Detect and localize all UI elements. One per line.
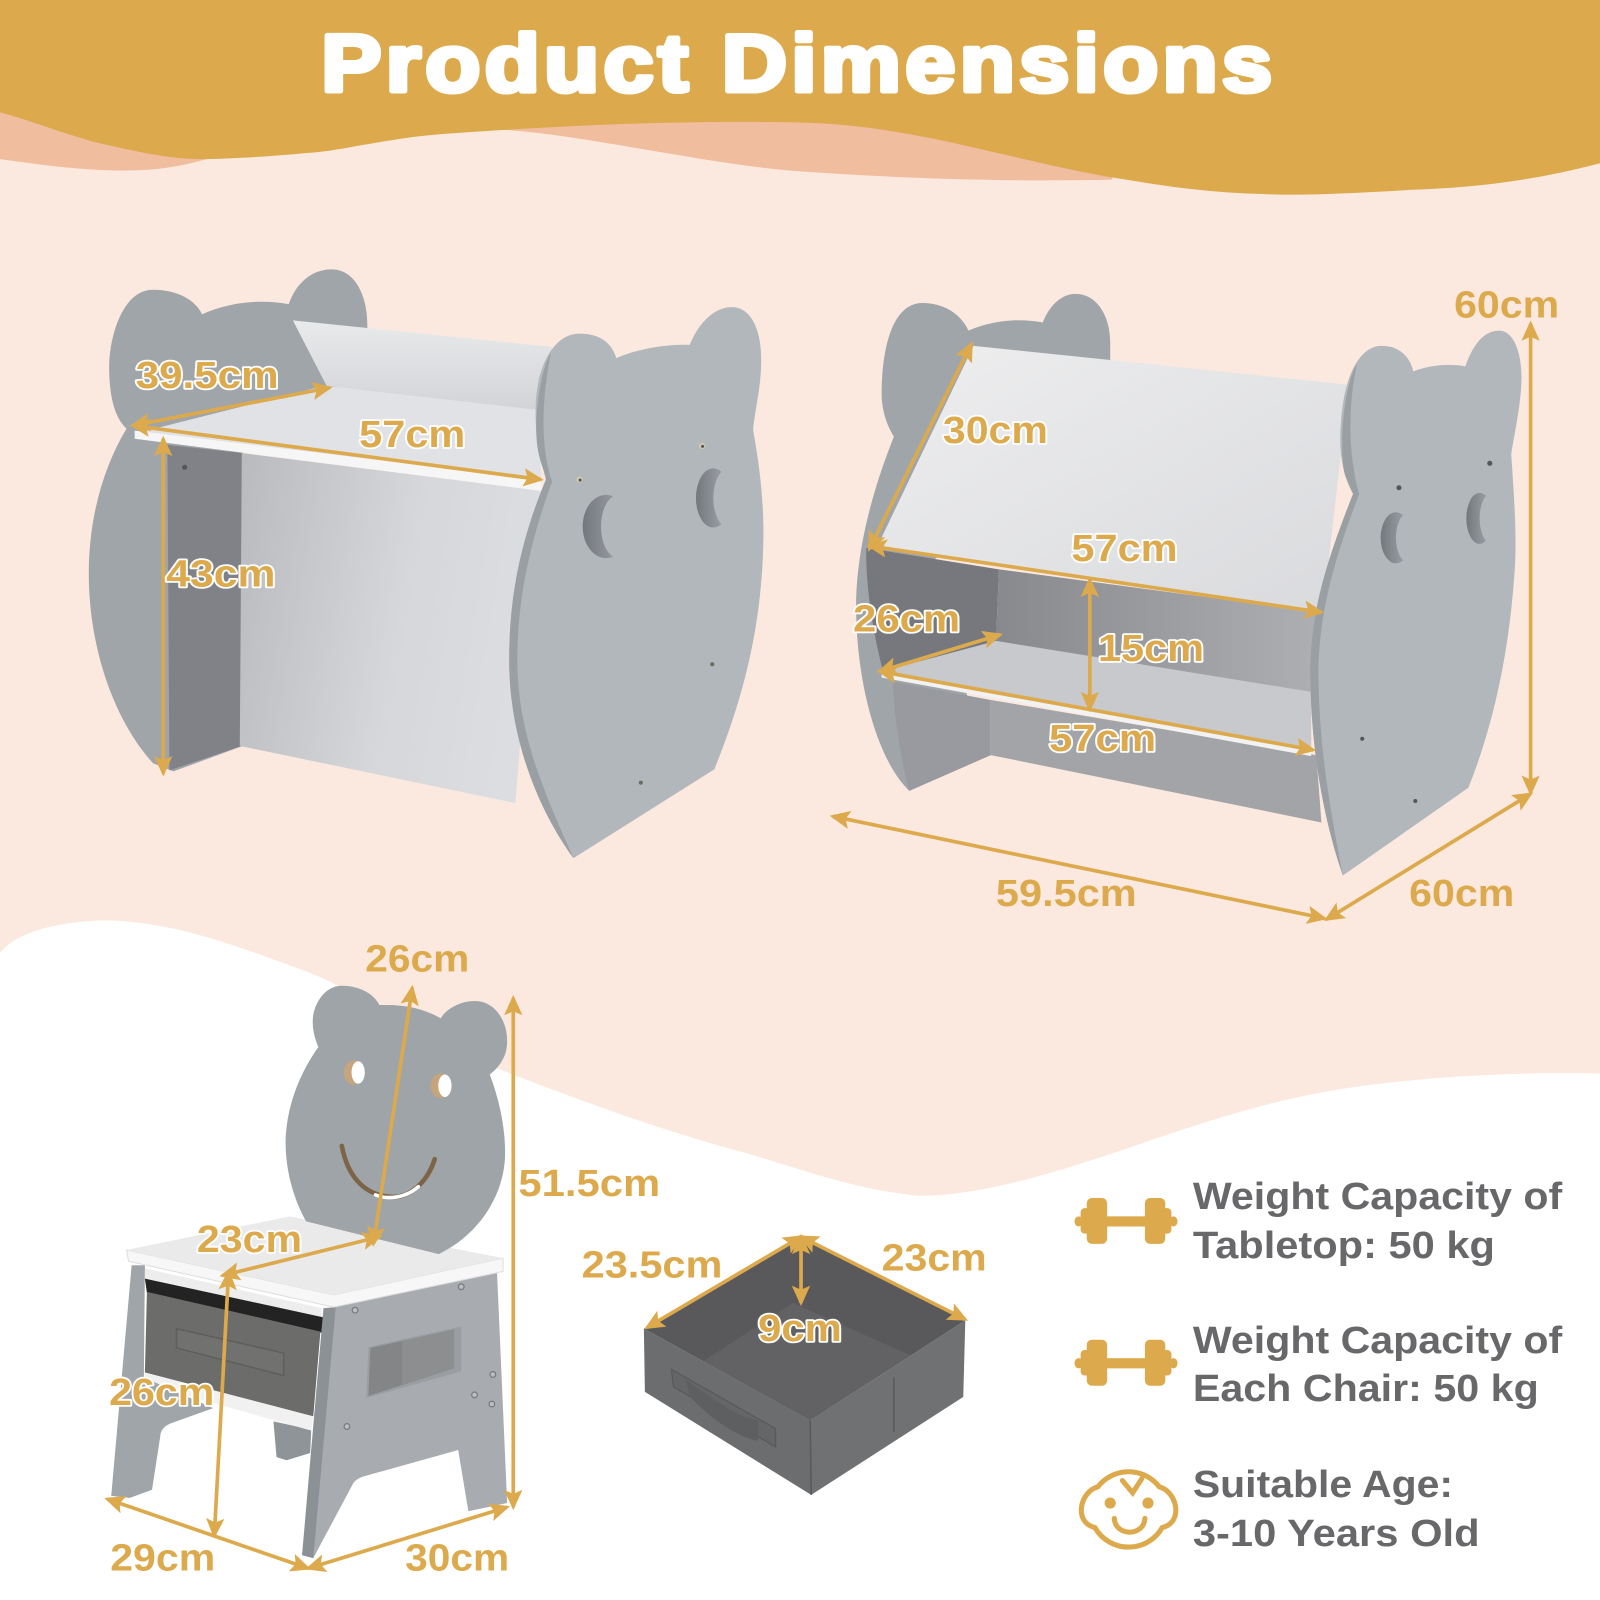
white bottom wave [0,920,1600,1600]
right side panel [302,1270,507,1558]
under-seat white strip [145,1268,321,1317]
header band [0,0,1600,195]
chair [111,986,507,1558]
dimension labels: 23.5cm [582,1244,722,1286]
capacity text: tabletop [1193,1175,1563,1266]
desk unit: left view [89,269,763,858]
tabletop front edge [135,431,541,491]
seat edge [127,1250,503,1307]
desk unit: right view [856,294,1522,876]
dark opening [145,1279,323,1333]
box seams [727,1285,894,1495]
back wall [240,453,541,803]
icon: baby face [1081,1472,1176,1547]
panel edge [509,352,573,858]
age text: Suitable Age: [1193,1463,1453,1505]
drawer handle [177,1329,284,1376]
back wall lower [991,700,1321,822]
dimension labels: 23cm [197,1218,302,1260]
front bear panel [1310,331,1522,876]
inner side lower [893,682,991,791]
box floor [703,1303,910,1420]
lower shelf [145,1372,313,1431]
dimension labels: 26cm [365,937,469,979]
dimension labels: 15cm [1098,627,1204,669]
dimension labels: 39.5cm [136,354,279,396]
far bear panel [856,294,1110,791]
dimension labels: 57cm [1049,717,1156,759]
dimension labels: 59.5cm [996,872,1137,914]
screws [344,1284,496,1429]
shelf edge [882,670,1311,756]
box right face [810,1320,965,1495]
dimension labels: 51.5cm [518,1162,660,1204]
eyes [344,1060,452,1098]
dimension labels: 60cm [1409,872,1514,914]
seat top [127,1216,503,1295]
capacity text: chair: Weight Capacity of [1193,1319,1563,1361]
knobs [1360,461,1504,803]
drawer [145,1292,320,1416]
dimension labels: 60cm [1454,283,1559,325]
dimension labels [109,283,1559,1578]
icon: dumbbell tabletop [1074,1198,1178,1244]
salmon wave [0,102,1122,180]
dimension labels: 57cm [359,413,465,455]
age text [1193,1463,1480,1554]
icon: dumbbell chair [1074,1340,1178,1386]
backrest [286,986,507,1254]
sloped top panel [878,346,1349,614]
dimension labels: 30cm [943,409,1048,451]
front bear panel [509,307,763,858]
dimension labels: 23cm [882,1236,987,1278]
dimension arrows [107,323,1531,1568]
capacity text: tabletop: Tabletop: 50 kg [1193,1224,1495,1266]
dimension labels: 29cm [110,1536,215,1578]
storage box [644,1237,965,1495]
right panel inner edge [302,1307,336,1558]
panel edge [1310,363,1359,876]
dimension labels: 43cm [166,553,276,595]
back wall upper [996,569,1320,694]
inner dark side upper [866,548,999,673]
box interior [644,1237,965,1420]
tabletop [135,386,541,482]
dimension labels: 57cm [1071,527,1178,569]
box handle [671,1369,776,1447]
side window [366,1327,461,1398]
dimension labels: 26cm [853,598,960,640]
box left face [644,1329,811,1495]
far bear panel [89,269,367,771]
dimension labels: 26cm [109,1371,214,1413]
capacity text: chair [1193,1319,1563,1409]
dimension labels: 9cm [758,1307,842,1349]
dimension labels: 30cm [405,1536,509,1578]
smile [342,1146,435,1198]
capacity text: chair: Each Chair: 50 kg [1193,1367,1539,1409]
chair back leg [273,1421,311,1460]
knobs [182,443,744,785]
sloped back board [293,320,552,412]
title: Product Dimensions [321,19,1277,109]
inner side [167,445,242,770]
age text: 3-10 Years Old [1193,1512,1480,1554]
left side panel [111,1265,213,1498]
capacity text: tabletop: Weight Capacity of [1193,1175,1563,1217]
shelf [882,641,1311,750]
